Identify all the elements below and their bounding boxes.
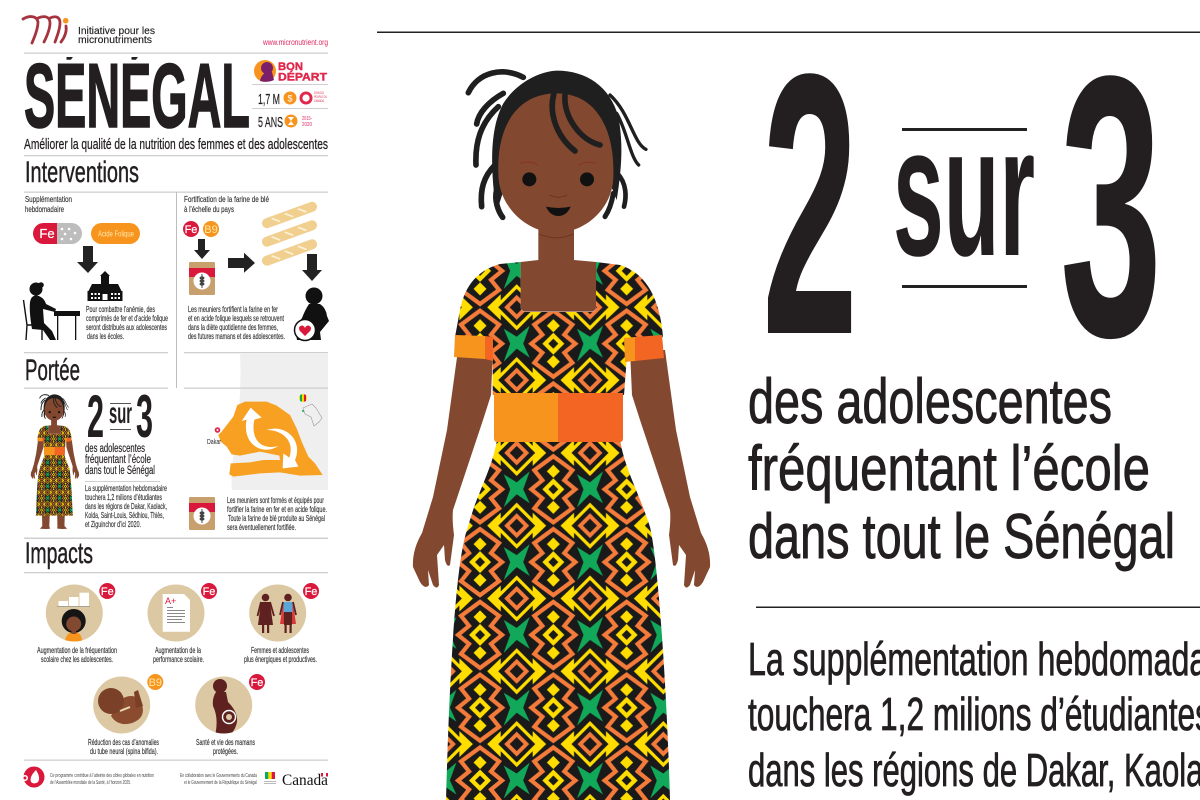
- stat: 2 sur 3 small: 3: [136, 383, 153, 450]
- text: adolescents small: [85, 443, 155, 477]
- icon: baguettes: [261, 200, 318, 267]
- logo: Bon Départ: [254, 60, 327, 84]
- footer: Ce programme contribue à l’atteinte des cibles globales en nutrition: [50, 773, 154, 779]
- impact: school attendance: Augmentation de la fréquentation: [37, 645, 117, 655]
- text: reach description: dans les régions de Dakar, Kaolack,: [85, 501, 167, 511]
- duration: 5 ans: 2015-: [302, 116, 312, 122]
- impact: neural tube: Réduction des cas d’anomalies: [88, 737, 159, 747]
- stat: 2 sur 3: sur: [893, 89, 1035, 295]
- icon: flour bag: [189, 262, 215, 295]
- impact: energy and productivity: Femmes et adolescentes: [251, 645, 309, 655]
- text: adolescents small: fréquentant l’école: [85, 454, 151, 466]
- text: millers description: fortifier la farine en fer et en acide folique.: [227, 504, 327, 514]
- panel: flour fortification: [183, 194, 329, 341]
- stat: 2 sur 3 small: [87, 383, 153, 450]
- stat: 2 sur 3: [762, 0, 1162, 414]
- footer: et le Gouvernement de la République du Sénégal: [184, 780, 257, 786]
- text: supplementation description: comprimés de fer et d’acide folique: [86, 313, 168, 323]
- text: millers description: Les meuniers sont formés et équipés pour: [227, 495, 324, 505]
- website: www.micronutrient.org: [262, 37, 328, 47]
- panel: weekly supplementation: [24, 194, 168, 341]
- panel: header: [23, 17, 328, 156]
- text: adolescents small: dans tout le Sénégal: [85, 465, 155, 477]
- text: fortification description: des futures mamans et des adolescentes.: [188, 331, 285, 341]
- footer: En collaboration avec le Gouvernements du Canada: [180, 773, 257, 779]
- text: supplementation description: dans les écoles.: [87, 331, 124, 341]
- impact: maternal health: [195, 674, 265, 756]
- text: reach description: [85, 483, 167, 529]
- panel: flour fortification: à l’échelle du pays: [184, 204, 234, 214]
- text: fortification description: et en acide folique lesquels se retrouvent: [188, 313, 284, 323]
- icon: school: [88, 271, 122, 301]
- icon: iron pill: Fe: [39, 226, 55, 241]
- icon: iron pill: [33, 223, 82, 244]
- impact: school attendance: [37, 583, 117, 664]
- funding: 1,7 M: CANADA: [314, 99, 324, 103]
- badge: Fe: [183, 221, 199, 237]
- footer: [22, 766, 328, 789]
- impact: school performance: Fe: [203, 586, 215, 598]
- impact: school performance: A+: [165, 596, 176, 606]
- text: adolescents small: des adolescentes: [85, 443, 145, 455]
- panel: impacts: [37, 583, 319, 756]
- impact: maternal health: Fe: [251, 677, 263, 689]
- inset: Africa with Senegal flag: [299, 394, 322, 426]
- subtitle: Améliorer la qualité de la nutrition des femmes et des adolescentes: [24, 136, 328, 153]
- text: fortification description: dans la diète quotidienne des femmes,: [188, 322, 278, 332]
- panel: weekly supplementation: Supplémentation: [25, 194, 72, 204]
- icon: flour bag 2: [189, 497, 215, 530]
- impact: school performance: performance scolaire.: [153, 654, 204, 664]
- text: adolescents attending school: [748, 367, 1175, 572]
- impact: neural tube: du tube neural (spina bifida).: [90, 746, 158, 756]
- map: Senegal shape: [218, 402, 323, 477]
- logo: Bon Départ: BON: [278, 61, 303, 73]
- footer: de l’Assemblée mondiale de la Santé, à l’horizon 2025.: [50, 780, 131, 786]
- logo: Micronutrient Initiative: Initiative pour les: [78, 26, 155, 37]
- impact: energy and productivity: plus énergiques et productives.: [244, 654, 317, 664]
- impact: energy and productivity: [244, 583, 319, 664]
- badge: B9: [203, 221, 219, 237]
- badge: B9: B9: [204, 224, 218, 236]
- text: fortification description: [188, 304, 285, 341]
- text: millers description: [227, 495, 327, 532]
- icon: pregnant woman: [294, 288, 329, 340]
- arrow: down to flour: [194, 239, 210, 259]
- text: reach description: et Ziguinchor d’ici 2020.: [85, 519, 141, 529]
- pin: Dakar: Dakar: [207, 437, 221, 446]
- heading: Impacts: Impacts: [25, 537, 93, 570]
- impact: neural tube: B9: [149, 677, 162, 689]
- text: millers description: Toute la farine de blé produite au Sénégal: [228, 513, 325, 523]
- text: supplementation description: Pour combattre l’anémie, des: [86, 304, 155, 314]
- text: supplementation reach: [748, 633, 1200, 796]
- flag: Senegal: [264, 772, 276, 784]
- impact: school performance: Augmentation de la: [155, 645, 201, 655]
- panel: coverage two in three: [31, 383, 327, 532]
- heading: Portée: Portée: [25, 354, 80, 387]
- logo: Micronutrient Initiative: [23, 17, 155, 46]
- panel: flour fortification: Fortification de la farine de blé: [184, 194, 269, 204]
- arrows: circular rotation: [242, 408, 298, 468]
- icon: student at desk: [24, 282, 80, 340]
- title: Sénégal: SÉNÉGAL: [24, 46, 250, 147]
- impact: energy and productivity: Fe: [305, 586, 317, 598]
- impact: neural tube: [88, 674, 163, 756]
- funding: 1,7 M: 1,7 M: [258, 91, 280, 108]
- stat: 2 sur 3 small: 2: [87, 383, 104, 450]
- impact: maternal health: protégées.: [213, 746, 238, 756]
- heading: Interventions: Interventions: [25, 156, 139, 189]
- arrow: right to bread: [228, 253, 255, 273]
- pin: Dakar: [207, 427, 221, 446]
- stat: 2 sur 3: 2: [762, 0, 858, 412]
- stat: 2 sur 3 small: sur: [109, 397, 132, 430]
- impact: maternal health: Santé et vie des mamans: [196, 737, 255, 747]
- logo: Micronutrient Initiative: micronutriments: [78, 35, 152, 46]
- icon: folic acid pill: Acide Folique: [98, 228, 134, 238]
- impact: school attendance: Fe: [101, 586, 114, 598]
- funding: 1,7 M: DON DU: [314, 91, 324, 95]
- figure: girl small: [31, 394, 79, 529]
- arrow: down to mother: [302, 254, 322, 281]
- panel: weekly supplementation: hebdomadaire: [25, 204, 64, 214]
- text: supplementation description: seront distribués aux adolescentes: [86, 322, 167, 332]
- funding: 1,7 M: PEUPLE DU: [314, 95, 327, 99]
- funding: 1,7 M: $: [287, 94, 293, 104]
- duration: 5 ans: 2020: [302, 122, 312, 128]
- impact: school performance: [148, 583, 217, 664]
- text: reach description: touchera 1,2 milions d’étudiantes: [85, 492, 162, 502]
- duration: 5 ans: 5 ANS: [258, 114, 283, 131]
- logo: Bon Départ: DÉPART: [278, 70, 327, 84]
- text: reach description: La supplémentation hebdomadaire: [85, 483, 167, 493]
- text: supplementation description: [86, 304, 168, 341]
- logo: global nutrition targets: [22, 766, 44, 788]
- text: millers description: sera éventuellement fortifiée.: [227, 522, 296, 532]
- icon: folic acid pill: [91, 223, 140, 244]
- logo: Canada: Canada: [282, 772, 328, 789]
- badge: Fe: Fe: [185, 224, 197, 236]
- figure: girl in patterned dress: [413, 71, 710, 800]
- text: reach description: Kolda, Saint-Louis, Sédhiou, Thiès,: [85, 510, 164, 520]
- top rule: [377, 32, 1200, 33]
- panel: map of Senegal: [184, 353, 328, 490]
- impact: school attendance: scolaire chez les adolescentes.: [41, 654, 113, 664]
- text: fortification description: Les meuniers fortifient la farine en fer: [188, 304, 278, 314]
- funding: 1,7 M: [258, 91, 327, 108]
- arrow: down to school: [77, 246, 98, 273]
